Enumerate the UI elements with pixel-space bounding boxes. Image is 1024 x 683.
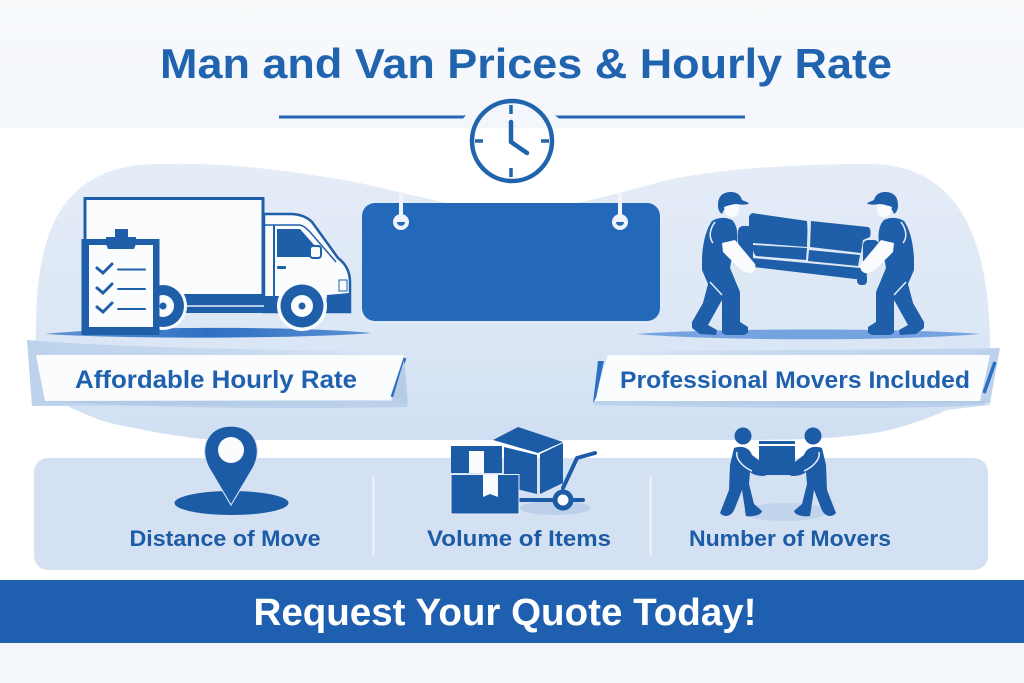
left mover — [692, 192, 756, 335]
cap — [867, 192, 898, 214]
left ribbon — [27, 340, 408, 408]
front wheel — [277, 281, 327, 331]
ground shadow — [45, 328, 372, 338]
face — [724, 205, 739, 217]
ground shadow — [636, 330, 980, 339]
rear wheel — [139, 282, 187, 330]
bottom box — [451, 474, 519, 514]
title rule right — [555, 116, 745, 118]
call to action bar — [0, 580, 1024, 643]
panel: bottom factors — [34, 458, 988, 570]
window — [277, 229, 315, 257]
ribbon label: Professional Movers Included — [620, 367, 970, 394]
top box — [451, 446, 502, 473]
cargo box — [85, 198, 263, 296]
cap — [718, 192, 749, 214]
sign hanger right — [612, 192, 628, 230]
right figure — [788, 428, 836, 516]
chassis — [170, 296, 280, 313]
right ribbon — [592, 348, 1000, 408]
call to action text: Request Your Quote Today! — [254, 592, 756, 634]
box — [759, 441, 795, 475]
left figure — [720, 428, 768, 516]
title rule left — [279, 116, 466, 118]
icon: clipboard checklist — [82, 229, 160, 335]
icon: movers carrying sofa — [636, 192, 980, 339]
label: volume: Volume of Items — [427, 526, 611, 551]
icon: boxes on trolley — [451, 427, 595, 515]
sofa — [738, 213, 879, 285]
body — [692, 218, 748, 335]
ribbon label: Affordable Hourly Rate — [75, 366, 357, 394]
title: Man and Van Prices & Hourly Rate — [160, 40, 892, 87]
icon: two movers with box — [720, 428, 836, 521]
arm — [860, 240, 894, 273]
background blob panel — [32, 164, 990, 440]
trolley — [520, 453, 595, 500]
icon: location pin — [174, 426, 288, 515]
face — [877, 205, 892, 217]
large box — [493, 427, 563, 453]
right mover — [860, 192, 924, 335]
arm — [722, 240, 756, 273]
icon: clock — [472, 101, 552, 181]
sign board — [362, 192, 660, 321]
icon: delivery truck — [45, 198, 372, 338]
label: distance: Distance of Move — [130, 526, 320, 551]
sign hanger left — [393, 192, 409, 230]
cab — [264, 214, 350, 312]
body — [868, 218, 924, 335]
label: movers: Number of Movers — [689, 526, 891, 551]
